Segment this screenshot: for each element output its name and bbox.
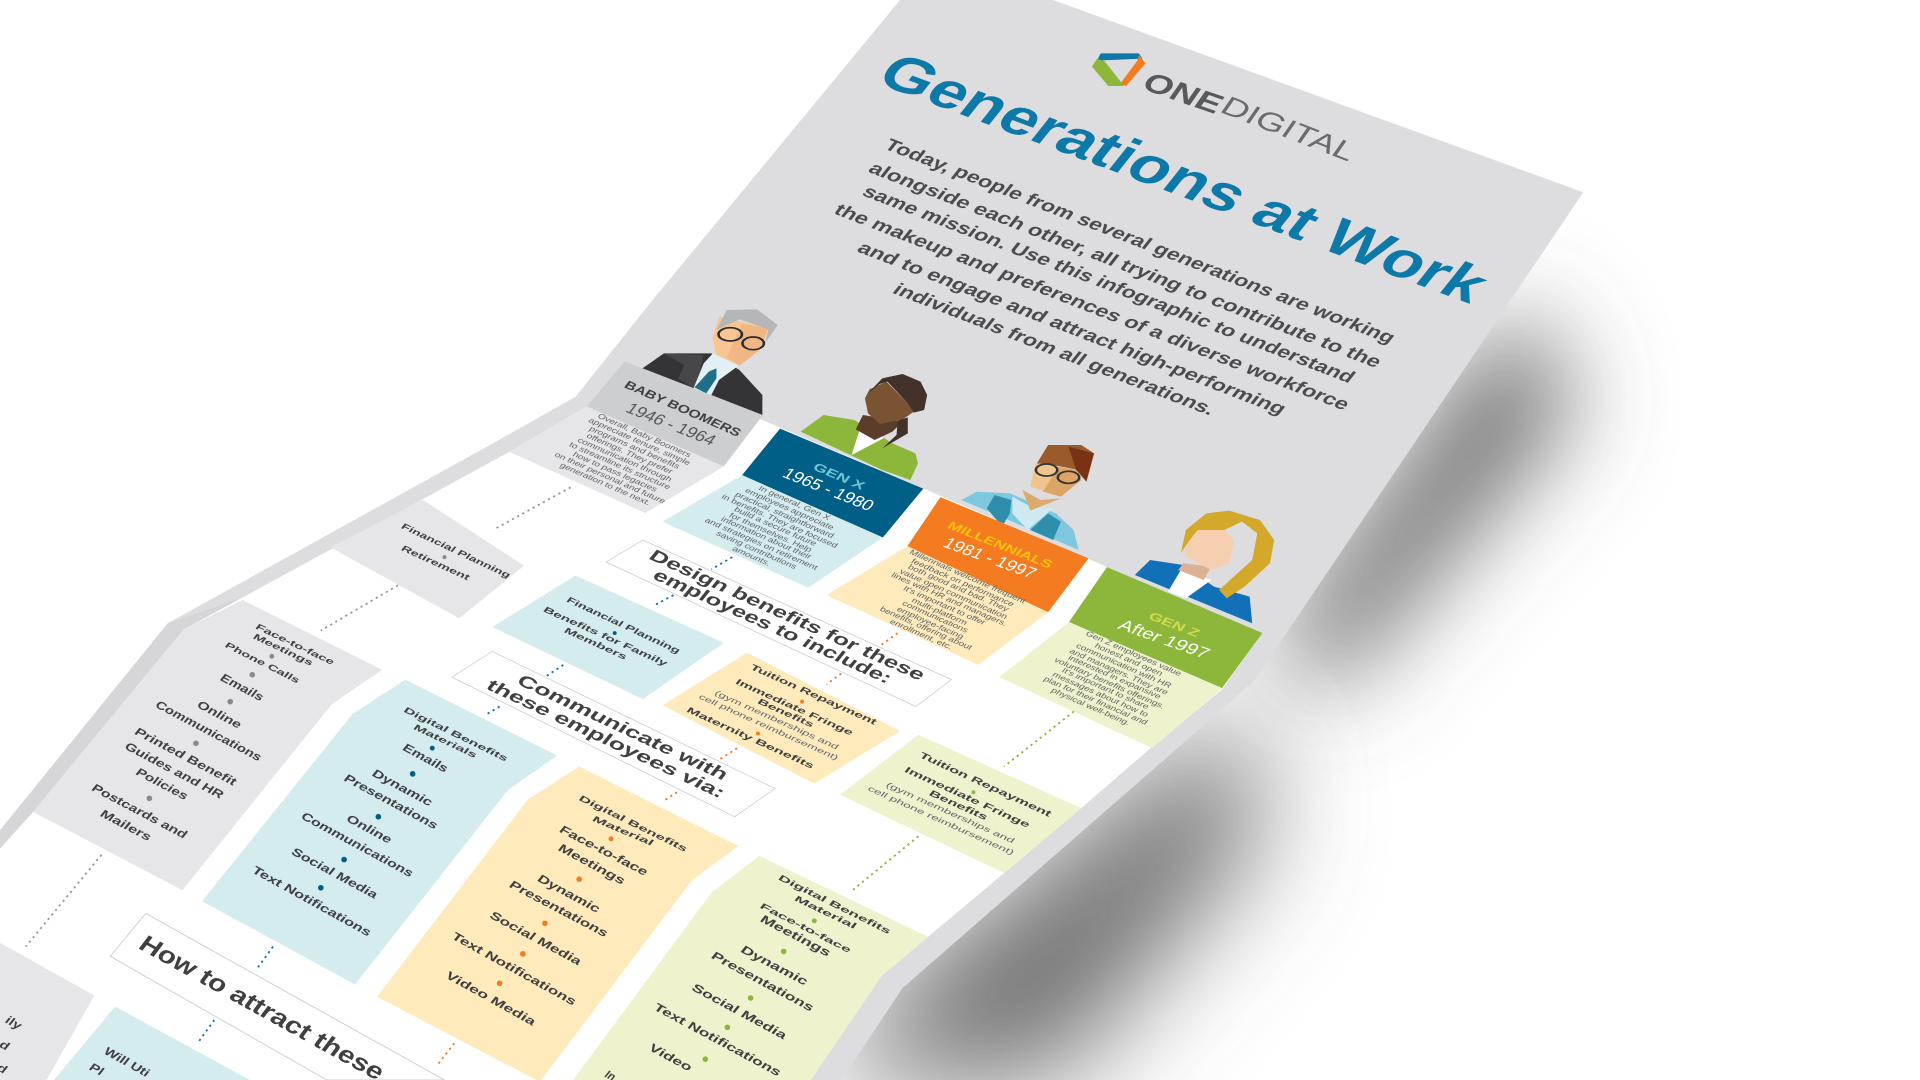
panel: millennial benefits: Maternity Benefits <box>684 706 817 771</box>
gen z description: communication with HR <box>1074 642 1174 690</box>
baby boomers description: programs and benefits <box>587 425 683 471</box>
millennials description: Millennials welcome frequent <box>908 548 1029 605</box>
card: millennials <box>827 497 1089 665</box>
panel: millennial communication: Material <box>590 815 656 848</box>
panel: gen x communication: Digital Benefits <box>401 706 510 764</box>
millennials description: feedback on performance <box>909 557 1016 608</box>
gen z header: GEN Z <box>1146 610 1203 639</box>
icon: logo mark <box>1092 53 1146 86</box>
intro paragraph: Today, people from several generations are working <box>880 135 1400 348</box>
gen z description: messages about how to <box>1051 670 1151 719</box>
heading: design benefits <box>606 540 951 707</box>
panel: millennial benefits <box>662 653 900 784</box>
gen z description: honest and open <box>1093 641 1165 678</box>
panel: gen x attraction: Pl <box>87 1061 107 1078</box>
panel: gen x attraction <box>54 1007 250 1080</box>
panel: millennial communication <box>377 767 738 1080</box>
gen z header: After 1997 <box>1115 616 1214 662</box>
millennials header <box>907 497 1089 612</box>
panel: gen z benefits: Benefits <box>927 789 990 822</box>
panel: millennial communication: Video Media <box>443 969 540 1028</box>
panel: millennial benefits: (gym memberships and <box>713 689 841 751</box>
gen x header: GEN X <box>810 460 868 492</box>
panel: millennial communication: Presentations <box>507 878 611 939</box>
gen x description: saving contributions <box>714 529 799 571</box>
panel: gen z communication: Text Notifications <box>651 1001 784 1079</box>
logo wordmark: ONE <box>1136 67 1230 120</box>
millennials description <box>827 546 1048 665</box>
panel: gen z benefits: (gym memberships and <box>884 781 1017 845</box>
panel: gen z communication: Presentations <box>709 949 817 1014</box>
gen x description: In general, Gen X <box>757 484 832 522</box>
panel: millennial communication: Meetings <box>555 842 628 887</box>
logo: OneDigital <box>1092 53 1362 167</box>
intro paragraph: individuals from all generations. <box>888 280 1220 419</box>
panel: boomer communication: Emails <box>218 671 267 703</box>
panel: gen z communication: Video <box>646 1041 695 1074</box>
gen x description: build a secure future <box>732 505 819 548</box>
panel: boomer communication: Postcards and <box>89 782 190 841</box>
intro paragraph: and to engage and attract high-performing <box>853 238 1291 419</box>
card: gen x <box>662 429 923 588</box>
panel: boomer communication <box>33 600 382 890</box>
gen x description: amounts. <box>730 544 773 567</box>
heading: design benefits: Design benefits for these <box>645 547 929 684</box>
millennials description: benefits, offering about <box>878 605 975 652</box>
panel: gen x benefits: Financial Planning <box>564 596 682 656</box>
panel: gen z communication: Social Media <box>689 981 791 1042</box>
heading: communicate <box>452 651 775 817</box>
gen z description: voluntary benefits offerings. <box>1052 656 1167 710</box>
heading: design benefits: employees to include: <box>649 566 896 687</box>
heading: communicate: these employees via: <box>482 677 729 802</box>
panel: gen x communication <box>202 680 557 984</box>
left fold strip <box>0 598 242 849</box>
intro paragraph <box>830 135 1400 419</box>
card: gen z <box>999 567 1262 748</box>
logo wordmark <box>1136 67 1362 167</box>
panel: millennial communication: Text Notifications <box>449 930 579 1008</box>
gen x description: practical, straightforward <box>733 490 836 540</box>
millennials description: employee-facing <box>895 605 966 641</box>
panel: gen z benefits: Immediate Fringe <box>902 765 1033 830</box>
panel: boomer communication: Online <box>194 698 245 731</box>
panel: boomer communication: Face-to-face <box>253 623 337 667</box>
portrait: baby boomer man <box>642 309 778 415</box>
panel: millennial communication: Digital Benefits <box>576 794 690 854</box>
panel: millennial communication: Face-to-face <box>557 823 651 878</box>
panel: gen x communication: Text Notifications <box>249 864 374 939</box>
panel: millennial communication: Social Media <box>487 909 585 968</box>
panel: gen z communication: Material <box>792 895 859 931</box>
gen z header <box>1069 567 1262 688</box>
heading: communicate: Communicate with <box>513 672 732 784</box>
millennials description: It's important to offer <box>901 584 988 626</box>
millennials description: communications <box>900 599 971 634</box>
panel: gen z communication: Digital Benefits <box>776 874 893 937</box>
panel: gen x communication: Presentations <box>341 772 441 831</box>
panel: gen x communication: Dynamic <box>369 767 436 809</box>
panel: boomer communication: Guides and HR <box>122 740 227 801</box>
white page body <box>0 361 1262 1080</box>
panel: boomer communication: Communications <box>153 698 265 763</box>
millennials description: value open communication <box>898 567 1010 621</box>
gen x description <box>662 474 883 588</box>
panel: gen x benefits <box>492 576 724 699</box>
panel: boomer communication: Phone Calls <box>222 641 302 686</box>
panel: gen x communication: Materials <box>411 723 479 760</box>
panel: gen z benefits: cell phone reimbursement) <box>866 784 1016 856</box>
gen z description: It's important to share <box>1060 666 1151 711</box>
panel: gen x communication: Communications <box>298 810 417 879</box>
panel: millennial benefits: Tuition Repayment <box>748 663 880 727</box>
panel: boomer attraction <box>0 943 94 1080</box>
intro paragraph: the makeup and preferences of a diverse workforce <box>830 200 1354 414</box>
gen x description: for themselves. Help <box>727 511 814 554</box>
millennials description: enrollment, etc. <box>888 617 955 651</box>
panel: gen x attraction: Will Uti <box>101 1045 153 1079</box>
baby boomers description: communication through <box>576 436 674 483</box>
millennials description: both good and bad. They <box>906 563 1012 613</box>
panel: boomer communication: Policies <box>133 766 191 802</box>
panel: gen z benefits <box>840 735 1081 873</box>
baby boomers description: to streamline its structure <box>567 440 673 491</box>
intro paragraph: same mission. Use this infographic to understand <box>858 182 1359 387</box>
gen x description: employees appreciate <box>743 486 836 531</box>
gen z description <box>999 622 1222 748</box>
panel: boomer communication: Meetings <box>251 632 316 668</box>
baby boomers description: Overall, Baby Boomers <box>596 412 694 459</box>
portrait: gen x woman <box>801 374 927 480</box>
dotted connectors <box>26 487 1074 1065</box>
millennials description: multi-platform <box>910 596 969 627</box>
panel: millennial communication: Dynamic <box>535 872 603 915</box>
baby boomers description: generation to the next. <box>558 461 653 507</box>
baby boomers description <box>509 407 724 513</box>
baby boomers header: 1946 - 1964 <box>622 399 720 449</box>
millennials header: MILLENNIALS <box>945 519 1056 571</box>
panel: gen x communication: Emails <box>400 741 451 775</box>
gen z description: Gen Z employees value <box>1084 629 1184 678</box>
panel: millennial benefits: cell phone reimbursement) <box>697 692 841 762</box>
portrait: gen z woman <box>1135 511 1274 623</box>
panel: boomer communication: Printed Benefit <box>132 725 240 788</box>
panel: boomer benefits <box>331 500 524 618</box>
baby boomers header: BABY BOOMERS <box>622 378 744 439</box>
panel: millennial benefits: Immediate Fringe <box>733 678 856 738</box>
card: baby boomers <box>509 361 763 513</box>
gen x header <box>742 429 923 538</box>
millennials header: 1981 - 1997 <box>939 534 1041 581</box>
panel: gen z communication: Face-to-face <box>758 902 854 955</box>
baby boomers description: how to pass legacies <box>571 450 660 494</box>
panel: gen x benefits: Members <box>562 626 630 662</box>
panel: boomer benefits: Retirement <box>399 544 473 583</box>
panel: gen z communication: Dynamic <box>738 943 811 988</box>
title: Generations at Work <box>867 42 1503 314</box>
gen z description: interested in expansive <box>1066 654 1163 700</box>
gen z description: plan for their financial and <box>1042 675 1150 726</box>
panel: gen x benefits: Benefits for Family <box>541 606 670 669</box>
portrait: millennial man <box>961 445 1094 550</box>
panel: gen x communication: Online <box>344 812 395 846</box>
baby boomers header <box>587 361 763 467</box>
panel: gen z communication <box>573 856 928 1080</box>
page shadow <box>820 306 1573 1080</box>
panel: millennial benefits: Benefits <box>755 697 816 730</box>
panel: boomer attraction: ily <box>2 1014 26 1032</box>
baby boomers description: offerings. They prefer <box>585 432 675 475</box>
millennials description: lines with HR and managers. <box>889 571 1009 628</box>
gen z description: and managers. They are <box>1068 647 1171 696</box>
intro paragraph: alongside each other, all trying to contribute to the <box>864 159 1386 372</box>
panel: boomer communication: Mailers <box>98 807 155 843</box>
gen z description: physical well-being. <box>1049 686 1132 727</box>
gen x description: and strategies on retirement <box>703 516 820 572</box>
panel: gen z communication: Meetings <box>758 913 834 959</box>
baby boomers description: appreciate tenure, simple <box>587 416 693 467</box>
panel: gen x communication: Social Media <box>289 845 382 901</box>
gen x header: 1965 - 1980 <box>779 464 878 514</box>
baby boomers description: on their personal and future <box>553 450 668 505</box>
gen x description: in benefits. They are focused <box>720 493 840 550</box>
logo wordmark: DIGITAL <box>1215 92 1362 167</box>
panel: boomer benefits: Financial Planning <box>399 522 512 580</box>
gen x description: information about their <box>719 515 814 561</box>
panel: gen z benefits: Tuition Repayment <box>917 751 1054 819</box>
